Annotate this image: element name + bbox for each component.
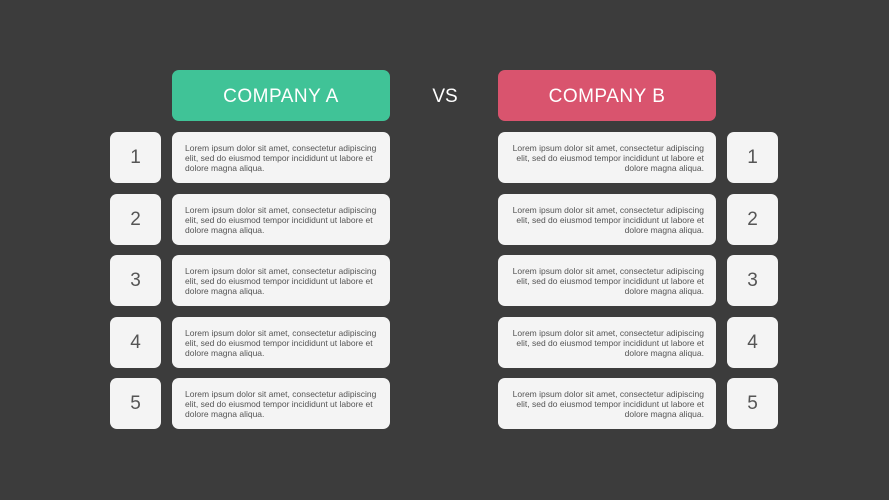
text B5: Lorem ipsum dolor sit amet, consectetur adipiscing [513, 389, 704, 399]
text A1: Lorem ipsum dolor sit amet, consectetur adipiscing [185, 143, 376, 153]
text B3: dolore magna aliqua. [625, 286, 704, 296]
text A4: Lorem ipsum dolor sit amet, consectetur adipiscing [185, 328, 376, 338]
header: company B: COMPANY B [549, 86, 665, 107]
text A5: Lorem ipsum dolor sit amet, consectetur adipiscing [185, 389, 376, 399]
text A3: Lorem ipsum dolor sit amet, consectetur adipiscing [185, 266, 376, 276]
row A2: 2 [130, 208, 141, 230]
row B1 [727, 132, 778, 183]
text B4: elit, sed do eiusmod tempor incididunt ut labore et [516, 338, 704, 348]
row B4: 4 [747, 332, 758, 352]
row A2 [110, 194, 161, 245]
text A3 [172, 255, 390, 306]
text A4: dolore magna aliqua. [185, 348, 264, 358]
text B1 [498, 132, 716, 183]
row B2: 2 [747, 208, 758, 230]
row B4 [727, 317, 778, 368]
right column [498, 132, 778, 429]
row B5: 5 [747, 392, 758, 414]
text B5 [498, 378, 716, 429]
text A4: elit, sed do eiusmod tempor incididunt ut labore et [185, 338, 373, 348]
row B3: 3 [747, 270, 758, 290]
row A3 [110, 255, 161, 306]
row A5: 5 [130, 392, 141, 414]
text B5: dolore magna aliqua. [625, 409, 704, 419]
header: company B [498, 70, 716, 121]
text A2: Lorem ipsum dolor sit amet, consectetur adipiscing [185, 205, 376, 215]
text B3: elit, sed do eiusmod tempor incididunt ut labore et [516, 276, 704, 286]
text B4 [498, 317, 716, 368]
text A1: elit, sed do eiusmod tempor incididunt ut labore et [185, 153, 373, 163]
row B3 [727, 255, 778, 306]
row B5 [727, 378, 778, 429]
text A5 [172, 378, 390, 429]
text A3: elit, sed do eiusmod tempor incididunt ut labore et [185, 276, 373, 286]
text B4: dolore magna aliqua. [625, 348, 704, 358]
header: company A [172, 70, 390, 121]
text B2: dolore magna aliqua. [625, 225, 704, 235]
text A1 [172, 132, 390, 183]
vs label: VS [432, 86, 458, 107]
text B2: elit, sed do eiusmod tempor incididunt ut labore et [516, 215, 704, 225]
text B2: Lorem ipsum dolor sit amet, consectetur adipiscing [513, 205, 704, 215]
text B1: Lorem ipsum dolor sit amet, consectetur adipiscing [513, 143, 704, 153]
row B2 [727, 194, 778, 245]
text B3: Lorem ipsum dolor sit amet, consectetur adipiscing [513, 266, 704, 276]
row A1: 1 [130, 146, 141, 168]
row A1 [110, 132, 161, 183]
text B3 [498, 255, 716, 306]
row A5 [110, 378, 161, 429]
text A1: dolore magna aliqua. [185, 163, 264, 173]
left column [110, 132, 390, 429]
text B1: dolore magna aliqua. [625, 163, 704, 173]
text A4 [172, 317, 390, 368]
header: company A: COMPANY A [223, 86, 339, 107]
text A2: elit, sed do eiusmod tempor incididunt ut labore et [185, 215, 373, 225]
row B1: 1 [747, 146, 758, 168]
text B2 [498, 194, 716, 245]
text A5: dolore magna aliqua. [185, 409, 264, 419]
text B5: elit, sed do eiusmod tempor incididunt ut labore et [516, 399, 704, 409]
row A4 [110, 317, 161, 368]
text A3: dolore magna aliqua. [185, 286, 264, 296]
text B1: elit, sed do eiusmod tempor incididunt ut labore et [516, 153, 704, 163]
text A2: dolore magna aliqua. [185, 225, 264, 235]
text B4: Lorem ipsum dolor sit amet, consectetur adipiscing [513, 328, 704, 338]
row A4: 4 [130, 332, 141, 352]
text A5: elit, sed do eiusmod tempor incididunt ut labore et [185, 399, 373, 409]
text A2 [172, 194, 390, 245]
row A3: 3 [130, 270, 141, 290]
